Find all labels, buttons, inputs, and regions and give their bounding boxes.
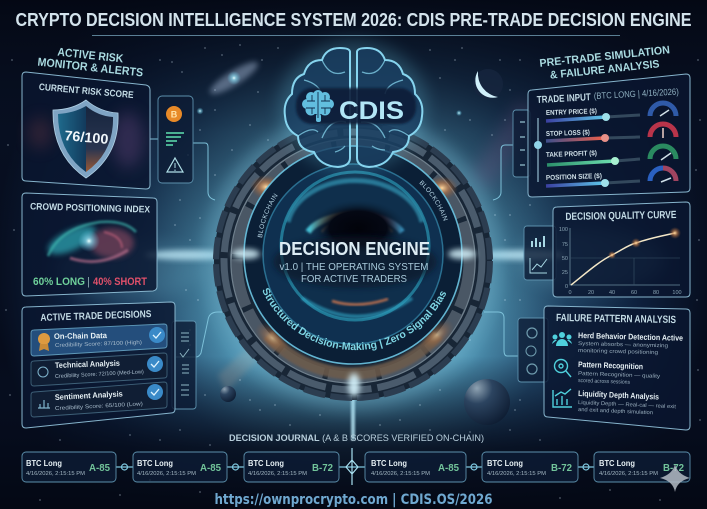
journal chain links xyxy=(116,448,594,485)
gauges xyxy=(650,103,676,182)
right header: PRE-TRADE SIMULATION xyxy=(539,44,670,70)
journal entry 2: A-85 xyxy=(200,463,221,474)
right header xyxy=(539,44,670,82)
engine heading: DECISION ENGINE xyxy=(279,239,430,259)
icon: bitcoin coin: B xyxy=(171,110,178,120)
line chart: 0 xyxy=(565,284,568,290)
panel: risk side alerts xyxy=(158,96,193,183)
panel: crowd positioning index: | xyxy=(87,276,90,288)
icon: large planet xyxy=(464,379,510,425)
journal entry 6: B-72 xyxy=(663,463,684,474)
left header xyxy=(37,47,144,80)
panel: current risk score: 76/100 xyxy=(64,127,109,147)
journal entry 1 xyxy=(22,452,116,482)
line chart: 20 xyxy=(588,290,594,296)
slider: position size: POSITION SIZE ($) xyxy=(546,173,602,182)
panel: crowd positioning index xyxy=(22,193,157,296)
row: on-chain data xyxy=(31,324,167,356)
journal entry 4: 4/16/2026, 2:15:15 PM xyxy=(371,471,430,477)
journal entry 6: BTC Long xyxy=(599,458,635,468)
journal entry 5: 4/16/2026, 2:15:15 PM xyxy=(487,471,546,477)
line chart: 25 xyxy=(562,270,568,276)
engine ring labels xyxy=(258,180,448,351)
panel: current risk score: CURRENT RISK SCORE xyxy=(38,82,134,101)
item: pattern recognition xyxy=(554,360,660,386)
panel: trade input side icons xyxy=(513,110,530,177)
icon: shield xyxy=(53,100,118,178)
panel: active trade decisions xyxy=(22,302,175,428)
item: herd behavior: monitoring crowd positioning xyxy=(578,348,658,356)
item: herd behavior: System absorbs — anonymizing xyxy=(578,341,668,349)
journal entry 4: A-85 xyxy=(438,463,459,474)
journal entry 4: BTC Long xyxy=(371,458,407,468)
row: sentiment analysis xyxy=(31,382,167,417)
item: pattern recognition: scored across sessions xyxy=(578,378,630,386)
row: sentiment analysis: Credibility Score: 65/100 (Low) xyxy=(55,401,143,412)
left header: ACTIVE RISK xyxy=(57,47,124,65)
CDIS brain logo xyxy=(279,40,427,172)
slider: entry price: ENTRY PRICE ($) xyxy=(546,108,597,117)
journal entry 2: 4/16/2026, 2:15:15 PM xyxy=(137,471,196,477)
item: liquidity depth: and exit and depth simulation xyxy=(578,407,653,416)
panel: crowd positioning index: 40% SHORT xyxy=(93,276,147,288)
journal entry 5 xyxy=(482,452,578,482)
engine ring labels: Structured Decision-Making | Zero Signal Bias xyxy=(262,288,446,351)
panel: decision quality curve xyxy=(553,202,690,297)
slider: position size xyxy=(546,173,640,187)
line chart: 0 xyxy=(568,290,572,296)
item: liquidity depth: Liquidity Depth — Real-cal — real exit xyxy=(578,400,677,410)
connector lines xyxy=(145,139,565,440)
decision journal heading: DECISION JOURNAL (A & B SCORES VERIFIED ON-CHAIN) xyxy=(229,433,484,444)
row: on-chain data: Credibility Score: 87/100 (High) xyxy=(55,340,142,349)
panel: trade input xyxy=(528,74,690,197)
item: herd behavior xyxy=(552,331,684,356)
journal entry 3: 4/16/2026, 2:15:15 PM xyxy=(248,471,307,477)
icon: crescent moon xyxy=(456,69,503,116)
item: pattern recognition: Pattern Recognition xyxy=(578,360,643,371)
panel: trade decisions side icons xyxy=(172,321,196,409)
journal entry 2 xyxy=(133,452,227,482)
row: sentiment analysis: Sentiment Analysis xyxy=(55,389,124,402)
icon: sparkle watermark xyxy=(660,464,690,492)
panel: failure pattern analysis xyxy=(544,306,690,430)
line chart: 40 xyxy=(609,290,615,296)
slider: stop loss: STOP LOSS ($) xyxy=(546,129,590,138)
line chart: 100 xyxy=(672,290,682,296)
icon: brain glyph xyxy=(302,90,334,122)
slider: take profit xyxy=(546,150,640,165)
journal entry 3: B-72 xyxy=(312,463,333,474)
footer url: https://ownprocrypto.com | CDIS.OS/2026 xyxy=(214,492,492,508)
engine heading xyxy=(279,239,430,285)
panel: active trade decisions: ACTIVE TRADE DECISIONS xyxy=(40,309,152,324)
item: herd behavior: Herd Behavior Detection Active xyxy=(578,331,684,343)
icon: signal bars xyxy=(166,133,184,145)
panel: quality curve side icons xyxy=(524,226,556,280)
slider: stop loss xyxy=(546,129,640,142)
panel: trade input: (BTC LONG | 4/16/2026) xyxy=(594,87,679,101)
line chart xyxy=(559,227,682,296)
line chart: 80 xyxy=(653,290,659,296)
panel: crowd positioning index: CROWD POSITIONING INDEX xyxy=(30,201,151,216)
central engine ring xyxy=(201,123,506,416)
icon: warning triangle xyxy=(167,158,183,172)
slider: entry price xyxy=(546,108,640,121)
right header: & FAILURE ANALYSIS xyxy=(549,58,660,82)
journal entry 5: BTC Long xyxy=(487,458,523,468)
panel: current risk score xyxy=(22,72,150,189)
panel: decision quality curve: DECISION QUALITY CURVE xyxy=(565,209,677,223)
panel: failure pattern analysis: FAILURE PATTERN ANALYSIS xyxy=(556,312,676,326)
engine ring labels: BLOCKCHAIN xyxy=(419,180,448,221)
journal entry 6: 4/16/2026, 2:15:15 PM xyxy=(599,471,658,477)
item: liquidity depth: Liquidity Depth Analysis xyxy=(578,389,660,402)
engine heading: v1.0 | THE OPERATING SYSTEM xyxy=(280,261,428,273)
journal entry 5: B-72 xyxy=(551,463,572,474)
item: liquidity depth xyxy=(553,389,677,416)
galaxy xyxy=(44,220,136,262)
left header: MONITOR & ALERTS xyxy=(37,57,144,80)
journal entry 4 xyxy=(365,452,466,482)
line chart: 100 xyxy=(559,227,568,233)
panel: failure side icons xyxy=(518,318,548,382)
journal entry 1: BTC Long xyxy=(26,458,62,468)
journal entry 1: 4/16/2026, 2:15:15 PM xyxy=(26,471,85,477)
item: pattern recognition: Pattern Recognition — quality xyxy=(578,371,660,380)
panel: trade input: TRADE INPUT xyxy=(537,92,591,106)
icon: small planet xyxy=(220,386,236,402)
journal entry 3: BTC Long xyxy=(248,458,284,468)
engine ring labels: BLOCKCHAIN xyxy=(258,193,278,238)
row: technical analysis xyxy=(31,353,167,386)
line chart: 50 xyxy=(562,256,568,262)
engine heading: FOR ACTIVE TRADERS xyxy=(301,273,407,285)
journal entry 2: BTC Long xyxy=(137,458,173,468)
vertical slider xyxy=(534,118,542,182)
icon: distant galaxy xyxy=(196,57,261,114)
journal entry 3 xyxy=(244,452,339,482)
row: technical analysis: Credibility Score: 72/100 (Med-Low) xyxy=(55,369,144,380)
line chart: 75 xyxy=(562,242,568,248)
CDIS brain logo: CDIS xyxy=(339,97,404,125)
line chart: 60 xyxy=(631,290,637,296)
journal entry 6 xyxy=(594,452,690,482)
slider: take profit: TAKE PROFIT ($) xyxy=(546,150,597,159)
row: technical analysis: Technical Analysis xyxy=(55,359,121,370)
journal entry 1: A-85 xyxy=(89,463,110,474)
panel: crowd positioning index: 60% LONG xyxy=(33,276,85,288)
row: on-chain data: On-Chain Data xyxy=(54,331,108,341)
